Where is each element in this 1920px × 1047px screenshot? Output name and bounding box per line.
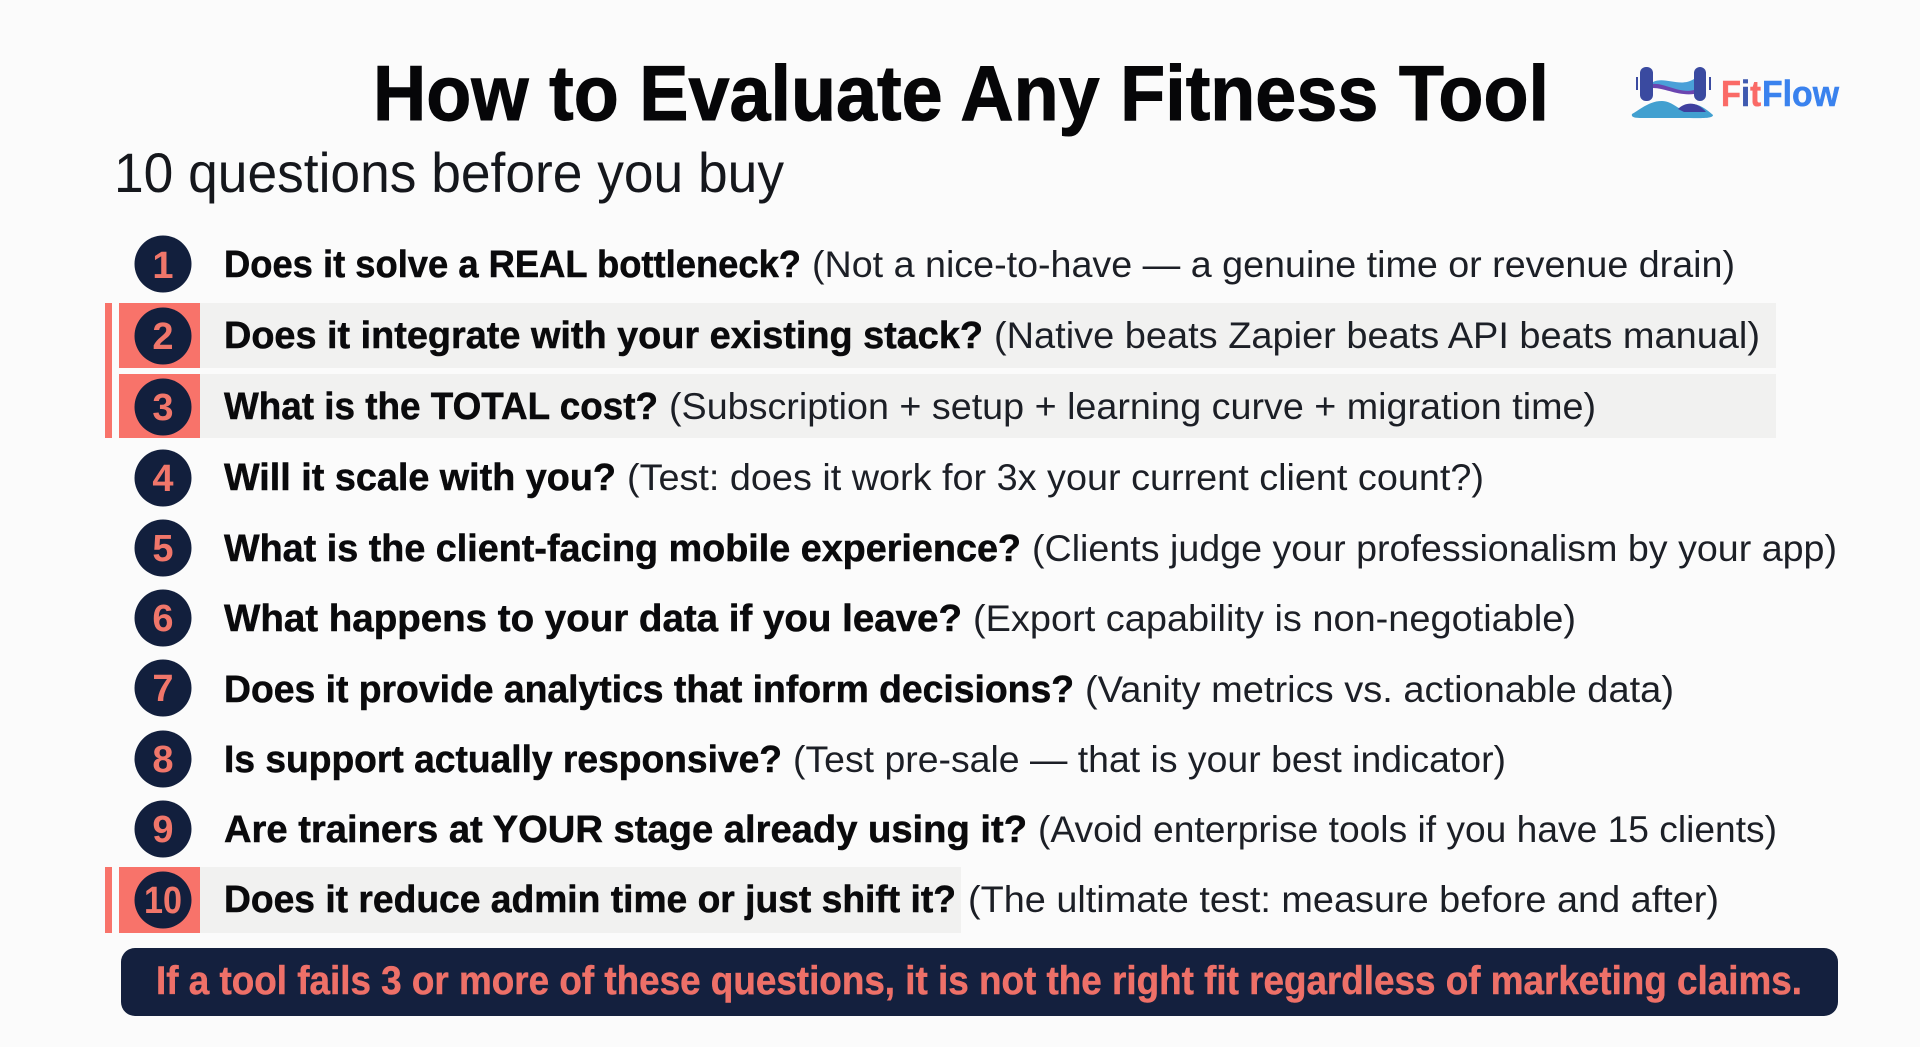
row 5: What is the client-facing mobile experience? <box>224 528 1021 570</box>
row 4: (Test: does it work for 3x your current client count?) <box>627 457 1484 498</box>
row 10: 10 <box>144 880 182 922</box>
row 3: What is the TOTAL cost? <box>224 386 658 428</box>
row 3: 3 <box>152 387 174 429</box>
title: How to Evaluate Any Fitness Tool <box>373 49 1549 137</box>
row 2 <box>119 303 1776 368</box>
row 5: 5 <box>152 528 174 570</box>
accent: highlight strip rows 2-3 <box>105 303 112 438</box>
row 7: 7 <box>152 668 174 710</box>
row 9: Are trainers at YOUR stage already using it? <box>224 809 1027 851</box>
row 10 <box>119 867 1719 933</box>
row 7 <box>134 660 1674 716</box>
row 9: 9 <box>152 809 174 851</box>
row 4 <box>134 450 1484 506</box>
row 3 <box>119 374 1776 438</box>
row 3: (Subscription + setup + learning curve + migration time) <box>669 386 1596 427</box>
subtitle: 10 questions before you buy <box>114 141 784 204</box>
row 8 <box>134 730 1506 788</box>
logo: FitFlow: Flow <box>1762 73 1840 114</box>
row 6: 6 <box>152 598 174 640</box>
row 6: (Export capability is non-negotiable) <box>973 598 1576 639</box>
row 2: 2 <box>152 316 174 358</box>
row 7: Does it provide analytics that inform decisions? <box>224 669 1074 711</box>
row 6: What happens to your data if you leave? <box>224 598 962 640</box>
row 8: 8 <box>152 739 174 781</box>
callout banner <box>121 948 1838 1016</box>
row 1: Does it solve a REAL bottleneck? <box>224 244 801 286</box>
row 1 <box>134 236 1735 292</box>
row 5 <box>134 520 1837 576</box>
row 9: (Avoid enterprise tools if you have 15 clients) <box>1038 809 1777 850</box>
row 8: Is support actually responsive? <box>224 739 782 781</box>
row 8: (Test pre-sale — that is your best indicator) <box>793 739 1506 780</box>
row 1: (Not a nice-to-have — a genuine time or revenue drain) <box>812 244 1735 285</box>
row 1: 1 <box>152 245 174 287</box>
accent: highlight strip row 10 <box>105 867 112 933</box>
row 9 <box>134 800 1777 858</box>
row 6 <box>134 590 1576 646</box>
row 10: Does it reduce admin time or just shift it? <box>224 879 956 921</box>
logo: FitFlow <box>1632 67 1840 118</box>
callout banner: If a tool fails 3 or more of these questions, it is not the right fit regardless of marketing claims. <box>156 959 1802 1003</box>
row 2: (Native beats Zapier beats API beats manual) <box>994 315 1760 356</box>
row 4: Will it scale with you? <box>224 457 616 499</box>
row 5: (Clients judge your professionalism by your app) <box>1032 528 1837 569</box>
row 10: (The ultimate test: measure before and after) <box>968 879 1719 920</box>
row 2: Does it integrate with your existing stack? <box>224 315 983 357</box>
logo: FitFlow: Fit <box>1721 73 1761 114</box>
row 4: 4 <box>152 458 174 500</box>
row 7: (Vanity metrics vs. actionable data) <box>1085 669 1674 710</box>
